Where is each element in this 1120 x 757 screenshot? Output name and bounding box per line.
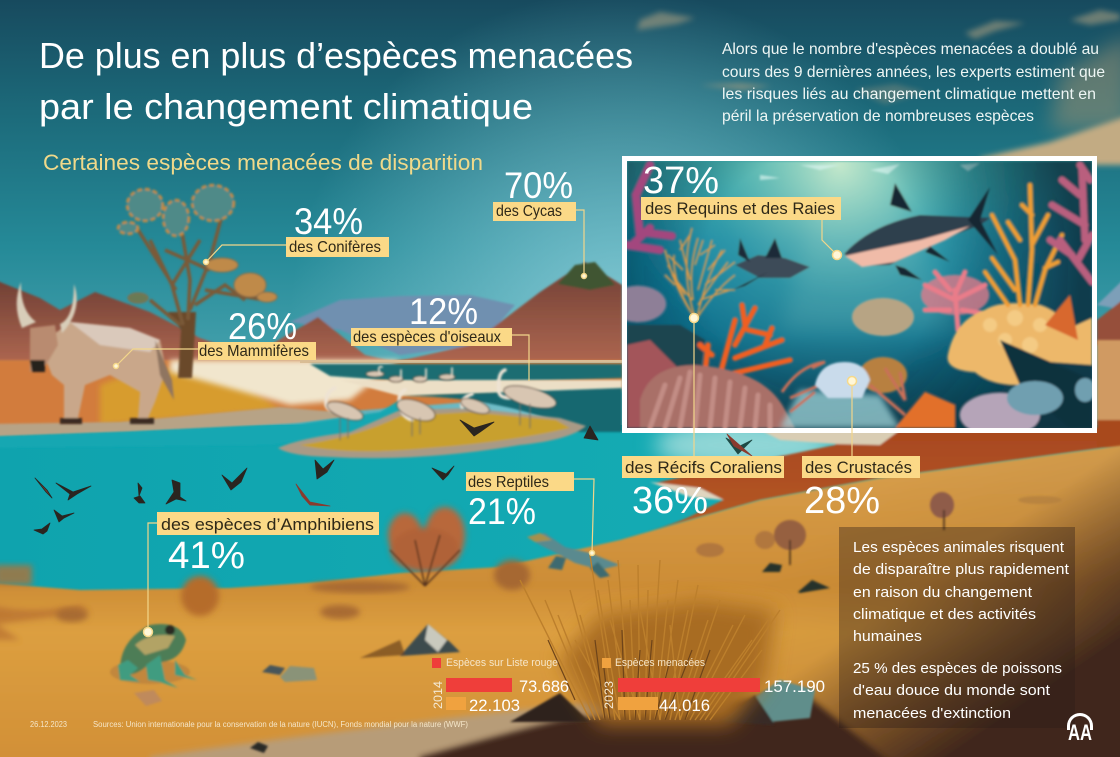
callout: cycads: des Cycas [496,203,562,220]
text: animal species: en raison du changement [853,584,1033,601]
text: animal species [853,539,1070,645]
flamingos [325,367,558,440]
callout: birds: 12% [409,291,478,332]
callout: conifers: des Conifères [289,239,381,256]
bar chart: 2023: 157.190 [764,677,825,696]
bar chart: 2023: 2023 [602,681,616,709]
text: animal species: de disparaître plus rapidement [853,561,1070,578]
panel: explanatory text [839,527,1075,728]
callout: conifers: 34% [294,201,363,242]
sea life [610,161,1095,437]
dry grass tuft [520,555,780,725]
bar chart: 2014: 2014 [431,681,445,709]
text: freshwater fish: 25 % des espèces de poissons [853,660,1062,677]
bar chart: 2023 [602,677,825,715]
text: animal species: climatique et des activités [853,606,1036,623]
subtitle: Certaines espèces menacées de disparition [43,150,483,175]
chart legend: Espèces menacées [615,657,705,669]
text: freshwater fish: menacées d'extinction [853,705,1011,722]
bar chart: 2023: 44.016 [659,696,710,715]
intro text block: cours des 9 dernières années, les experts estiment que [722,64,1105,81]
callout: birds [351,291,529,381]
text: animal species: humaines [853,628,922,645]
desert ground [0,445,1120,757]
callout: sharks and rays [641,160,842,260]
callout: reptiles [466,472,594,556]
text: freshwater fish [853,660,1062,722]
callout: amphibians [144,512,379,636]
bushes and rocks [0,492,1062,753]
flying birds [34,420,752,534]
callout: cycads [493,165,586,278]
callout: conifers [204,201,389,264]
text: freshwater fish: d'eau douce du monde sont [853,682,1051,699]
mountains [0,262,1120,362]
panel: underwater scene [610,158,1095,437]
callout: amphibians: des espèces d’Amphibiens [161,515,374,534]
icon: Anadolu Agency logo: AA [1068,720,1092,745]
callout: reptiles: 21% [468,491,536,532]
tree [118,185,277,378]
bar chart: 2014 [431,677,569,715]
callout: crustaceans: 28% [804,480,880,522]
frog [110,624,197,706]
callout: mammals: 26% [228,306,297,347]
island [278,408,586,458]
main title: De plus en plus d’espèces menacées [39,35,633,76]
callout: coral reefs: des Récifs Coraliens [625,458,782,477]
callout: coral reefs: 36% [632,480,708,522]
callout: mammals [114,306,316,368]
sources: Sources: Union internationale pour la conservation de la nature (IUCN), Fonds mondial pour la nature (WWF) [93,720,468,729]
bar chart: 2014: 22.103 [469,696,520,715]
bar chart: 2014: 73.686 [519,677,569,696]
lizard [527,533,632,578]
right landscape [620,340,1120,540]
chart legend: Espèces sur Liste rouge [446,657,558,669]
shore and lake [0,360,1120,605]
intro text block: Alors que le nombre d'espèces menacées a doublé au [722,41,1099,58]
callout: reptiles: des Reptiles [468,474,549,491]
sky background [0,0,1120,450]
callout: cycads: 70% [504,165,573,206]
white frame [624,158,1094,430]
intro text block: péril la préservation de nombreuses espèces [722,108,1034,125]
callout: coral reefs [622,314,784,522]
callout: amphibians: 41% [168,535,245,577]
main title [39,35,633,127]
callout: mammals: des Mammifères [199,343,309,360]
icon: Anadolu Agency logo [1067,713,1093,745]
callout: birds: des espèces d'oiseaux [353,329,501,346]
cow [17,282,174,424]
intro text block [722,41,1105,125]
callout: sharks and rays: 37% [643,160,719,202]
date: 26.12.2023 [30,720,68,729]
callout: sharks and rays: des Requins et des Raies [645,199,835,218]
main title: par le changement climatique [39,86,533,127]
intro text block: les risques liés au changement climatique mettent en [722,86,1096,103]
callout: crustaceans [802,376,920,522]
text: animal species: Les espèces animales risquent [853,539,1065,556]
callout: crustaceans: des Crustacés [805,458,912,477]
chart legend [432,657,705,669]
